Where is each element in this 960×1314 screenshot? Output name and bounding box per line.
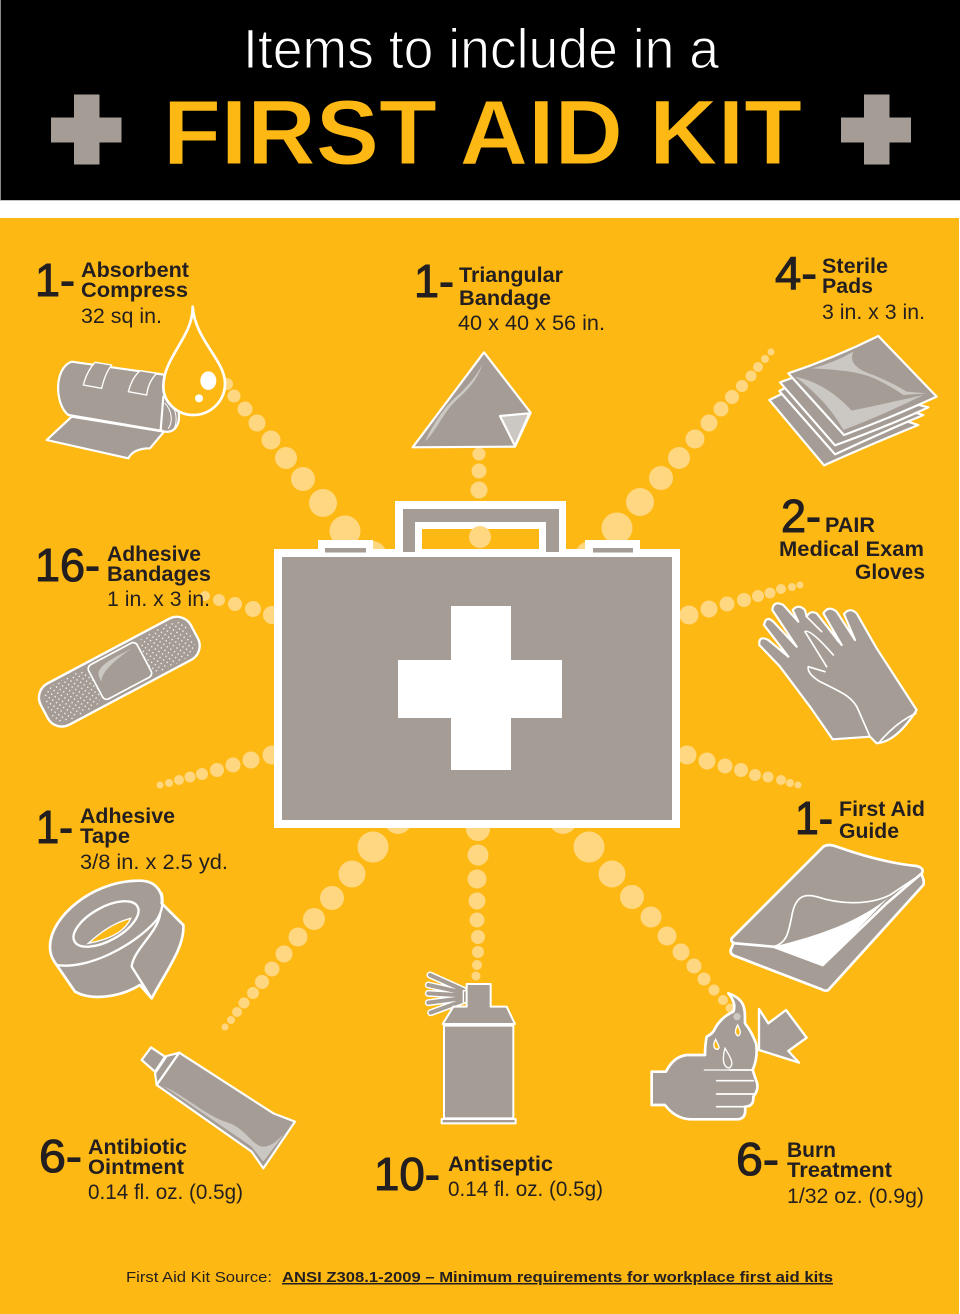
item: adhesive bandages — [33, 539, 211, 732]
item name: Adhesive — [80, 804, 175, 828]
icon: stack of pads — [769, 336, 937, 465]
item: triangular bandage: Bandage — [459, 286, 551, 310]
title line 1: Items to include in a — [243, 17, 720, 80]
dotted ray: burn treatment — [549, 806, 734, 1012]
item: first aid guide: Guide — [839, 819, 899, 843]
title line 2: FIRST AID KIT — [163, 82, 802, 184]
quantity: 4- — [775, 247, 817, 299]
item name: Antiseptic — [448, 1152, 553, 1176]
item: first aid guide — [731, 792, 925, 991]
case handle — [395, 501, 566, 552]
icon: spray can — [428, 975, 516, 1123]
icon: compress roll and drop — [47, 307, 233, 458]
item name: Absorbent — [81, 258, 189, 282]
icon: bandage — [33, 611, 205, 732]
item: adhesive tape: Tape — [80, 824, 130, 848]
icon: tape roll — [50, 881, 183, 998]
case body — [278, 553, 676, 824]
icon: right cross — [841, 94, 911, 164]
dotted ray: antibiotic ointment — [222, 806, 412, 1030]
dotted ray: adhesive tape — [156, 746, 282, 788]
size: 1/32 oz. (0.9g) — [787, 1185, 924, 1208]
right latch — [585, 540, 640, 552]
source citation: ANSI Z308.1-2009 – Minimum requirements for workplace first aid kits — [282, 1269, 833, 1286]
quantity: 1- — [36, 801, 73, 853]
dotted ray: sterile pads — [575, 348, 774, 571]
quantity: 1- — [795, 792, 833, 844]
item: sterile pads: Pads — [822, 274, 873, 298]
icon: burned hand with arrow — [652, 993, 807, 1119]
item: antibiotic ointment — [39, 1047, 295, 1204]
dotted ray: gloves — [680, 582, 804, 624]
item: medical exam gloves: Gloves — [855, 560, 925, 584]
item: medical exam gloves: Medical Exam — [779, 537, 924, 561]
icon: folded triangle — [413, 352, 531, 447]
source footer: First Aid Kit Source: — [126, 1269, 272, 1286]
item name: Sterile — [822, 254, 888, 278]
item name: PAIR — [825, 513, 875, 537]
item: adhesive tape — [36, 801, 228, 998]
icon: ointment tube — [142, 1047, 295, 1168]
size: 3 in. x 3 in. — [822, 301, 925, 324]
dotted ray: absorbent compress — [221, 378, 387, 571]
source footer — [126, 1269, 833, 1286]
item: medical exam gloves — [759, 490, 925, 743]
item name: First Aid — [839, 797, 925, 821]
white cross — [398, 606, 562, 770]
item name: Antibiotic — [88, 1135, 187, 1159]
quantity: 16- — [35, 539, 100, 591]
item name: Triangular — [459, 263, 564, 287]
item: burn treatment — [652, 993, 924, 1208]
quantity: 6- — [39, 1130, 82, 1182]
quantity: 1- — [414, 255, 454, 307]
size: 1 in. x 3 in. — [107, 588, 210, 611]
dotted ray: triangular bandage — [470, 448, 488, 498]
item: burn treatment: Treatment — [787, 1158, 892, 1182]
icon: gloves — [759, 603, 917, 743]
dotted ray: first aid guide — [678, 746, 802, 788]
item: sterile pads — [769, 247, 937, 465]
item: triangular bandage — [413, 255, 605, 447]
first aid kit case — [278, 501, 676, 824]
size: 0.14 fl. oz. (0.5g) — [448, 1178, 603, 1201]
size: 40 x 40 x 56 in. — [458, 312, 605, 335]
left latch — [318, 540, 373, 552]
quantity: 10- — [374, 1148, 440, 1200]
icon: booklet — [731, 845, 924, 991]
item: absorbent compress — [35, 254, 233, 458]
icon: left cross — [51, 94, 122, 164]
header banner — [0, 0, 960, 200]
item name: Burn — [787, 1138, 836, 1162]
dotted ray: adhesive bandages — [200, 591, 281, 624]
dotted ray: antiseptic — [466, 817, 490, 980]
size: 32 sq in. — [81, 305, 162, 328]
quantity: 1- — [35, 254, 75, 306]
size: 3/8 in. x 2.5 yd. — [80, 851, 228, 874]
item: adhesive bandages: Bandages — [107, 562, 211, 586]
item name: Adhesive — [107, 542, 201, 566]
item: absorbent compress: Compress — [81, 278, 188, 302]
size: 0.14 fl. oz. (0.5g) — [88, 1181, 243, 1204]
item: antiseptic — [374, 975, 603, 1201]
quantity: 6- — [736, 1133, 779, 1185]
item: antibiotic ointment: Ointment — [88, 1155, 184, 1179]
quantity: 2- — [781, 490, 821, 542]
